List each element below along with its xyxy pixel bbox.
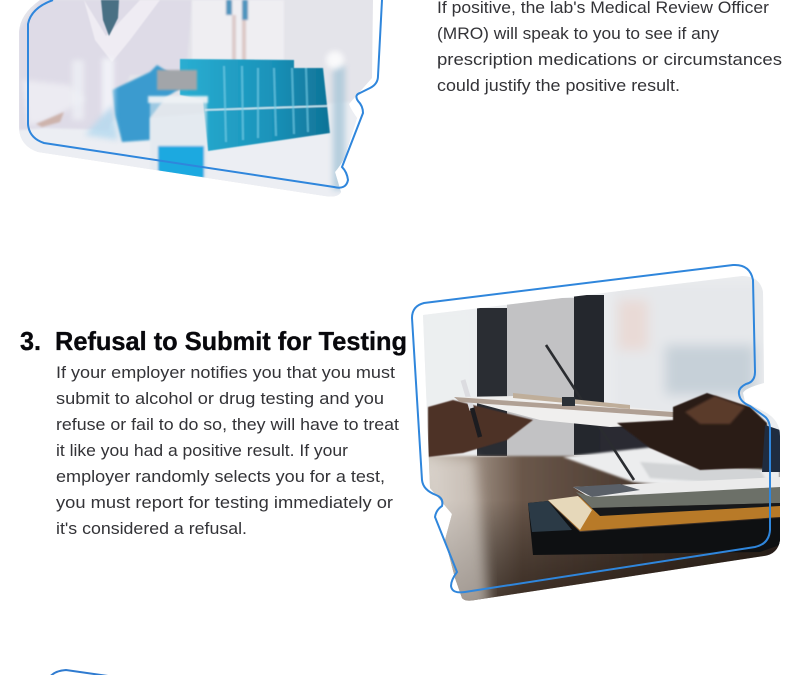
paragraph: refusal explanation: you must report for testing immediately or [56, 493, 393, 512]
photo: handing over a clipboard [415, 265, 785, 610]
photo: lab technician with blue test tubes [19, 0, 373, 196]
paragraph: refusal explanation: refuse or fail to do so, they will have to treat [56, 415, 399, 434]
blurred window view [614, 294, 761, 406]
outline frame: lab photo [28, 0, 382, 188]
paragraph: refusal explanation: it like you had a positive result. If your [56, 441, 348, 460]
window columns [507, 298, 574, 458]
paragraph: MRO review: prescription medications or circumstances [437, 50, 782, 69]
paragraph: MRO review [437, 0, 782, 95]
laptop and papers [563, 446, 780, 484]
lab coat [19, 0, 192, 130]
blue glove [112, 65, 187, 142]
paragraph: refusal explanation [56, 363, 399, 538]
shadow under clipboard [604, 426, 652, 454]
pipettes [192, 0, 284, 62]
outline frame: clipboard photo [412, 265, 770, 592]
heading: 3. Refusal to Submit for Testing: 3. [20, 326, 41, 356]
paragraph: refusal explanation: If your employer notifies you that you must [56, 363, 395, 382]
right hand and sleeve [617, 393, 768, 470]
left hand [428, 400, 533, 457]
standing pen [546, 345, 634, 480]
paragraph: refusal explanation: employer randomly selects you for a test, [56, 467, 385, 486]
blurred foreground flasks [72, 51, 345, 190]
next photo frame, top edge [48, 670, 150, 675]
paragraph: MRO review: (MRO) will speak to you to see if any [437, 24, 720, 43]
blue test tube rack [180, 59, 330, 151]
stack of notebooks [573, 477, 780, 499]
paragraph: refusal explanation: submit to alcohol or drug testing and you [56, 389, 384, 408]
table surface [20, 103, 356, 196]
paragraph: MRO review: could justify the positive result. [437, 76, 680, 95]
tie [101, 0, 119, 36]
clipboard [466, 396, 672, 427]
beaker [148, 96, 208, 178]
forearm [36, 112, 64, 127]
paragraph: refusal explanation: it's considered a refusal. [56, 519, 247, 538]
wooden table [420, 456, 785, 606]
heading: 3. Refusal to Submit for Testing: Refusal to Submit for Testing [55, 326, 407, 356]
